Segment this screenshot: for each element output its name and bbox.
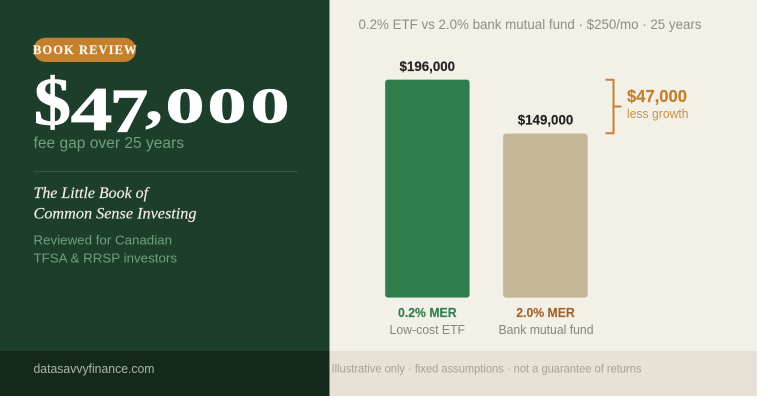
callout: difference: $47,000 (627, 86, 687, 106)
headline number: $47,000: 4 (71, 74, 112, 143)
headline number: $47,000: 7 (110, 77, 148, 146)
footer: left brand strip: datasavvyfinance.com (34, 361, 154, 376)
book title: Common Sense Investing (34, 205, 196, 222)
review note: TFSA & RRSP investors (34, 250, 178, 265)
headline number: $47,000: 0 (251, 78, 289, 133)
bar: bank mutual fund: 2.0% MER (516, 305, 575, 320)
review note: Reviewed for Canadian (34, 232, 172, 248)
bar: low-cost ETF (385, 58, 470, 337)
headline number: $47,000 (34, 65, 289, 146)
bar chart (385, 58, 594, 337)
headline number: $47,000: 0 (166, 78, 204, 133)
bar: bank mutual fund: Bank mutual fund (498, 323, 594, 337)
bar: low-cost ETF: 0.2% MER (398, 305, 457, 320)
panel: left green summary (0, 0, 330, 351)
footer: disclaimer strip: Illustrative only · fixed assumptions · not a guarantee of returns (332, 362, 642, 376)
bar: low-cost ETF: Low-cost ETF (390, 323, 465, 337)
bar: low-cost ETF: $196,000 (400, 58, 455, 74)
chart subtitle: 0.2% ETF vs 2.0% bank mutual fund · $250/mo · 25 years (358, 16, 702, 32)
caption: fee gap: fee gap over 25 years (34, 135, 184, 152)
bar: bank mutual fund: $149,000 (518, 112, 573, 128)
callout: difference: less growth (627, 106, 688, 121)
panel: right comparison (330, 0, 757, 351)
badge: book review: BOOK REVIEW (33, 43, 137, 57)
badge: book review (33, 38, 137, 62)
book title: The Little Book of (34, 185, 151, 202)
bar: bank mutual fund (498, 112, 594, 337)
footer: disclaimer strip (330, 351, 757, 396)
callout: difference (627, 86, 688, 121)
headline number: $47,000: $ (34, 65, 71, 140)
review note (34, 232, 178, 265)
book title (34, 185, 196, 222)
bracket: difference between bars (606, 80, 622, 133)
headline number: $47,000: 0 (208, 78, 246, 133)
headline number: $47,000: , (145, 68, 163, 133)
footer: left brand strip (0, 351, 330, 396)
